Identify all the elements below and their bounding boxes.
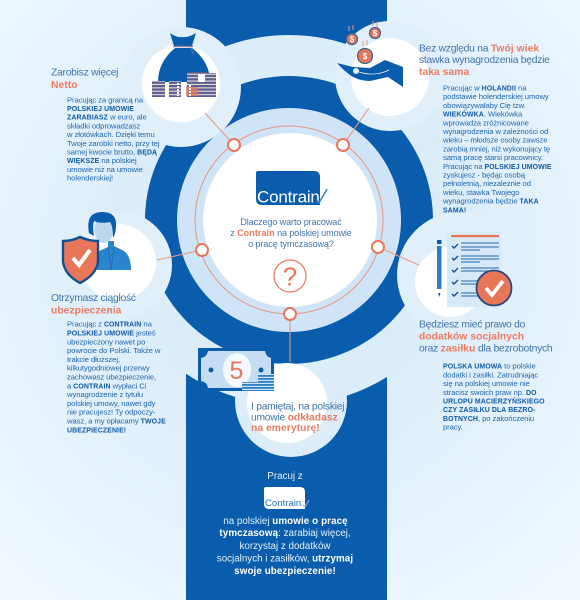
dark ring xyxy=(145,76,433,364)
icon: hand with coins: $ xyxy=(363,52,368,61)
small logo: Contrain xyxy=(265,498,301,509)
call to action: swoje ubezpieczenie! xyxy=(234,566,336,577)
text: insurance xyxy=(66,320,166,434)
centre white disc xyxy=(203,133,377,307)
icon: person with shield xyxy=(63,212,131,283)
heading: pension: I pamiętaj, na polskiej xyxy=(251,402,344,412)
heading: age xyxy=(419,44,550,78)
heading: age: taka sama xyxy=(419,67,469,78)
white circle: left xyxy=(80,224,156,300)
heading: benefits: oraz zasiłku dla bezrobotnych xyxy=(419,344,553,354)
centre question: z Contrain na polskiej umowie xyxy=(230,228,352,238)
text: insurance: wynagrodzenie z tytułu xyxy=(66,390,143,399)
icon: hand with coins xyxy=(337,21,403,87)
white circle: bottom xyxy=(247,363,327,443)
icon: hand with coins: $ xyxy=(373,29,378,38)
heading: netto: Netto xyxy=(51,80,78,91)
heading: pension: na emeryturę! xyxy=(251,423,320,434)
call to action: na polskiej umowie o pracę xyxy=(223,516,348,527)
text: benefits xyxy=(443,362,545,432)
text: age: obowiązywałaby Cię tzw. xyxy=(443,101,526,110)
text: netto: holenderskiej! xyxy=(67,174,113,183)
connector lines xyxy=(157,108,419,362)
text: age: podstawie holenderskiej umowy xyxy=(443,92,549,101)
text: netto: WIĘKSZE na polskiej xyxy=(67,156,137,165)
text: benefits: URLOPU MACIERZYŃSKIEGO xyxy=(443,396,545,406)
text: netto: POLSKIEJ UMOWIE xyxy=(67,106,134,113)
text: netto: w złotówkach. Dzięki temu xyxy=(66,130,155,139)
text: benefits: CZY ZASIŁKU DLA BEZRO- xyxy=(443,407,536,414)
heading: pension: umowie odkładasz xyxy=(251,412,338,424)
central blue band xyxy=(186,0,387,600)
text: netto: Twoje zarobki netto, przy tej xyxy=(67,139,160,148)
halo: right xyxy=(397,212,523,338)
text: age: pełnoletnią, niezależnie od xyxy=(443,179,531,188)
text: netto: składki odprowadzasz xyxy=(67,121,140,130)
text: benefits: stracisz swoich praw np. DO xyxy=(443,388,537,397)
text: benefits: dodatki i zasiłki. Zatrudniając xyxy=(443,370,538,379)
heading: age: stawka wynagrodzenia będzie xyxy=(419,55,550,66)
bottom halo xyxy=(235,345,347,457)
light gap circle xyxy=(104,35,474,405)
heading: pension xyxy=(251,402,344,434)
text: benefits: się na polskiej umowie nie xyxy=(443,379,530,388)
heading: netto: Zarobisz więcej xyxy=(51,68,118,78)
centre question: Dlaczego warto pracować xyxy=(240,217,342,227)
icon: banknote: 5 xyxy=(230,357,243,385)
text: netto: umowie niż na umowie xyxy=(67,165,143,174)
text: netto xyxy=(66,96,160,183)
text: insurance: ubezpieczony nawet po xyxy=(67,337,145,346)
text: netto: samej kwocie brutto, BĘDĄ xyxy=(67,148,157,156)
heading: insurance: Otrzymasz ciągłość xyxy=(51,293,136,304)
logo: Contrain: Contrain xyxy=(257,188,320,206)
heading: age: Bez względu na Twój wiek xyxy=(419,44,539,54)
halo: top left xyxy=(121,27,241,147)
icon: hand with coins: $ xyxy=(350,35,355,44)
text: insurance: Pracując z CONTRAIN na xyxy=(67,320,153,329)
icon: money bag xyxy=(152,33,216,97)
inner light ring xyxy=(177,108,401,332)
call to action: Pracuj z xyxy=(267,471,303,482)
centre question: o pracę tymczasową? xyxy=(248,239,334,249)
text: insurance: a CONTRAIN wypłaci Ci xyxy=(67,381,147,390)
text: age: zarobią mniej, niż wykonujący tę xyxy=(443,144,550,153)
icon: question mark xyxy=(274,260,306,292)
text: benefits: pracy. xyxy=(443,423,463,432)
heading: benefits: dodatków socjalnych xyxy=(419,332,524,342)
white circle: right xyxy=(415,247,485,317)
text: netto: ZARABIASZ w euro, ale xyxy=(67,113,147,122)
text: insurance: nie pracujesz! Ty odpoczy- xyxy=(67,408,156,417)
call to action xyxy=(217,471,353,577)
heading: insurance: ubezpieczenia xyxy=(51,306,122,316)
text: benefits: BOTNYCH, po zakończeniu xyxy=(443,414,534,423)
call to action: tymczasową: zarabiaj więcej, xyxy=(219,528,351,539)
text: insurance: trakcie dłuższej, xyxy=(67,355,120,364)
text: insurance: POLSKIEJ UMOWIE jesteś xyxy=(67,328,156,338)
text: age: Pracując na POLSKIEJ UMOWIE xyxy=(443,162,552,171)
text: age: samą pracę starsi pracownicy. xyxy=(443,153,543,162)
white circle: top left xyxy=(142,44,220,122)
text: insurance: UBEZPIECZENIE! xyxy=(67,427,126,434)
call to action: socjalnych i zasiłków, utrzymaj xyxy=(217,554,353,564)
text: age: SAMA! xyxy=(443,207,466,214)
text: age xyxy=(442,84,552,214)
text: age: wprowadza zróżnicowane xyxy=(442,118,529,127)
text: age: zyskujesz - będąc osobą xyxy=(443,170,526,180)
text: insurance: polskiej umowy, nawet gdy xyxy=(67,399,156,408)
halo: top right xyxy=(335,21,445,131)
icon: question mark: ? xyxy=(283,262,297,292)
text: netto: Pracując za granicą na xyxy=(67,96,144,104)
text: age: wieku – młodsze osoby zawsze xyxy=(442,136,547,145)
centre question xyxy=(230,217,352,249)
ring nodes xyxy=(196,139,384,320)
call to action: korzystaj z dodatków xyxy=(240,541,331,552)
white circle: top right xyxy=(351,38,429,116)
heading: netto xyxy=(51,68,118,91)
text: insurance: kilkutygodniowej przerwy xyxy=(67,364,150,373)
halo: left xyxy=(64,211,172,319)
text: age: Pracując w HOLANDII na xyxy=(443,84,527,92)
text: benefits: POLSKA UMOWA to polskie xyxy=(443,362,536,371)
text: age: wieku, stawka Twojego xyxy=(442,188,519,197)
logo: Contrain xyxy=(256,171,327,206)
heading: insurance xyxy=(51,293,136,316)
text: insurance: zachowasz ubezpieczenie, xyxy=(67,372,156,382)
heading: benefits xyxy=(419,320,553,354)
text: age: WIEKÓWKA. Wiekówka xyxy=(443,110,523,119)
icon: checklist document xyxy=(437,232,512,307)
icon: banknote xyxy=(198,348,274,391)
text: insurance: powrocie do Polski. Także w xyxy=(67,346,161,355)
text: age: wynagrodzenia w zależności od xyxy=(442,127,548,136)
text: insurance: wasz, a my opłacamy TWOJE xyxy=(66,416,166,426)
text: age: wynagrodzenia będzie TAKA xyxy=(442,197,539,206)
heading: benefits: Będziesz mieć prawo do xyxy=(419,320,526,330)
